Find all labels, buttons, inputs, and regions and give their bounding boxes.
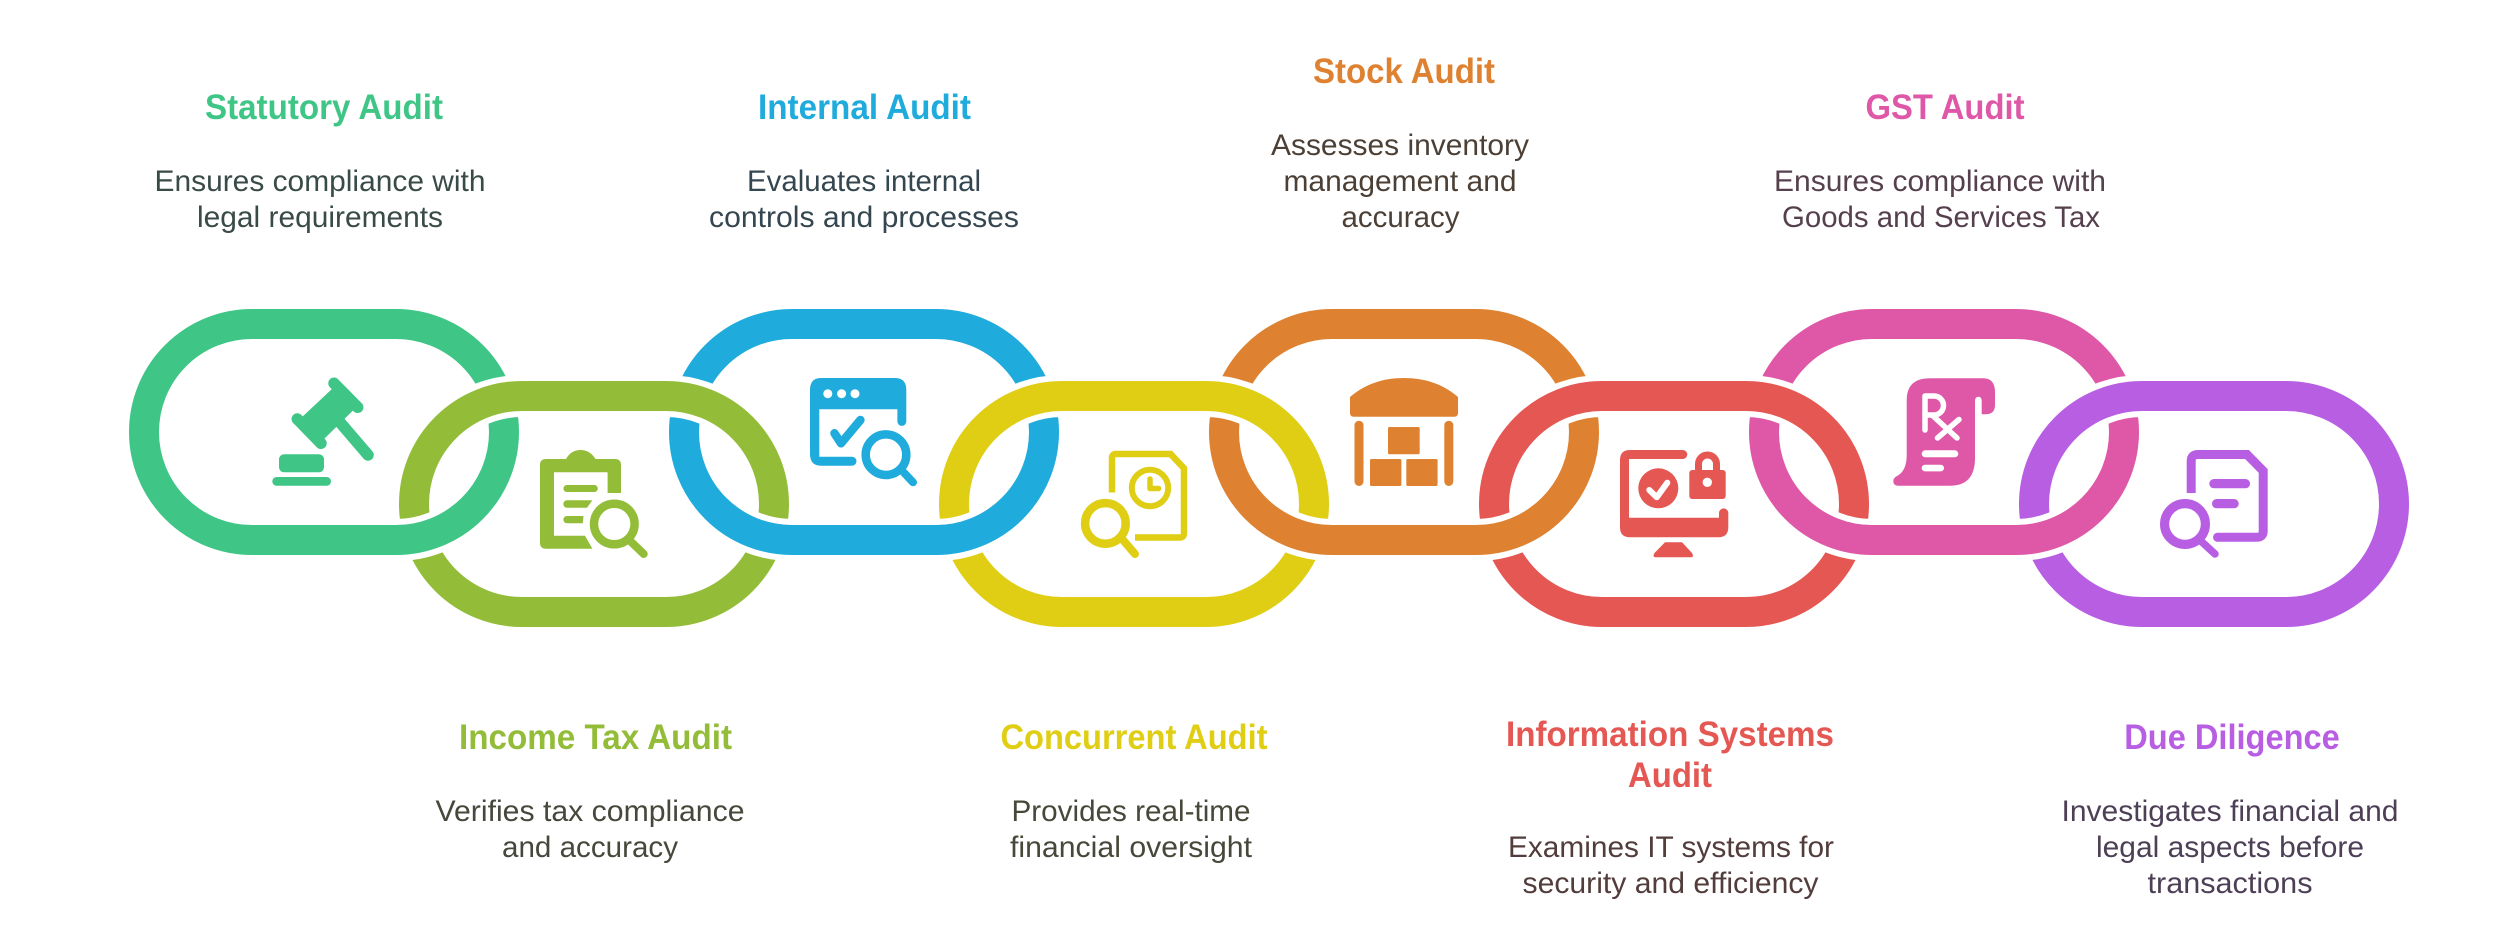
icon: browser window with check and magnifier xyxy=(810,378,913,482)
text block: concurrent audit: Concurrent Audit xyxy=(1000,718,1268,757)
interlock: stock ring over information systems ring xyxy=(1474,470,1593,560)
text block: stock audit: management and xyxy=(1284,165,1516,198)
text block: due diligence xyxy=(2062,718,2398,900)
interlock: internal ring over concurrent ring xyxy=(934,470,1053,560)
interlock: income tax ring over internal ring xyxy=(664,376,716,424)
interlock: statutory ring over income tax ring xyxy=(394,470,513,560)
ring: internal audit xyxy=(684,324,1044,540)
text block: income tax audit xyxy=(436,718,744,864)
text block: stock audit: Stock Audit xyxy=(1313,52,1495,91)
text block: due diligence: Due Diligence xyxy=(2124,718,2340,757)
text block: information systems audit: security and efficiency xyxy=(1522,867,1818,900)
text block: due diligence: transactions xyxy=(2148,867,2312,900)
text block: information systems audit: Examines IT systems for xyxy=(1508,831,1834,864)
text block: information systems audit: Information Systems xyxy=(1506,715,1834,754)
icon: clipboard with magnifier xyxy=(540,450,644,554)
interlocking chain of eight rings xyxy=(144,324,2394,612)
icon: document with magnifier xyxy=(2165,454,2263,554)
text block: statutory audit: Ensures compliance with xyxy=(154,165,486,198)
interlock: concurrent ring over stock ring xyxy=(1204,376,1256,424)
text block: income tax audit: Verifies tax compliance xyxy=(436,795,744,828)
text block: information systems audit xyxy=(1506,715,1834,900)
ring: information systems audit xyxy=(1494,396,1854,612)
text block: gst audit: Ensures compliance with xyxy=(1774,165,2106,198)
ring: gst audit xyxy=(1764,324,2124,540)
text block: internal audit: Evaluates internal xyxy=(747,165,981,198)
icon: prescription scroll xyxy=(1893,378,1995,486)
text block: stock audit: Assesses inventory xyxy=(1271,129,1529,162)
text block: due diligence: legal aspects before xyxy=(2096,831,2364,864)
text block: statutory audit: Statutory Audit xyxy=(205,88,443,127)
text block: internal audit: Internal Audit xyxy=(758,88,971,127)
ring: stock audit xyxy=(1224,324,1584,540)
text block: gst audit: GST Audit xyxy=(1866,88,2025,127)
icon: document with clock and magnifier xyxy=(1085,454,1184,554)
text block: internal audit: controls and processes xyxy=(709,201,1019,234)
ring: concurrent audit xyxy=(954,396,1314,612)
text block: income tax audit: and accuracy xyxy=(502,831,678,864)
text block: statutory audit: legal requirements xyxy=(197,201,443,234)
text block: concurrent audit: financial oversight xyxy=(1010,831,1253,864)
icon: monitor with check and padlock xyxy=(1620,450,1728,557)
text block: income tax audit: Income Tax Audit xyxy=(459,718,732,757)
icon: warehouse with boxes xyxy=(1350,378,1458,486)
text block: information systems audit: Audit xyxy=(1628,756,1712,795)
text block: concurrent audit xyxy=(1000,718,1268,864)
text block: stock audit: accuracy xyxy=(1342,201,1460,234)
interlock: gst ring over due diligence ring xyxy=(2014,470,2133,560)
text block: internal audit xyxy=(709,88,1019,234)
ring: statutory audit xyxy=(144,324,504,540)
text block: stock audit xyxy=(1271,52,1529,234)
icon: gavel xyxy=(272,383,368,486)
ring: income tax audit xyxy=(414,396,774,612)
text block: gst audit xyxy=(1774,88,2106,234)
text block: gst audit: Goods and Services Tax xyxy=(1782,201,2100,234)
text block: concurrent audit: Provides real-time xyxy=(1012,795,1250,828)
text block: statutory audit xyxy=(154,88,486,234)
text block: due diligence: Investigates financial and xyxy=(2062,795,2398,828)
ring: due diligence xyxy=(2034,396,2394,612)
interlock: information systems ring over gst ring xyxy=(1744,376,1796,424)
